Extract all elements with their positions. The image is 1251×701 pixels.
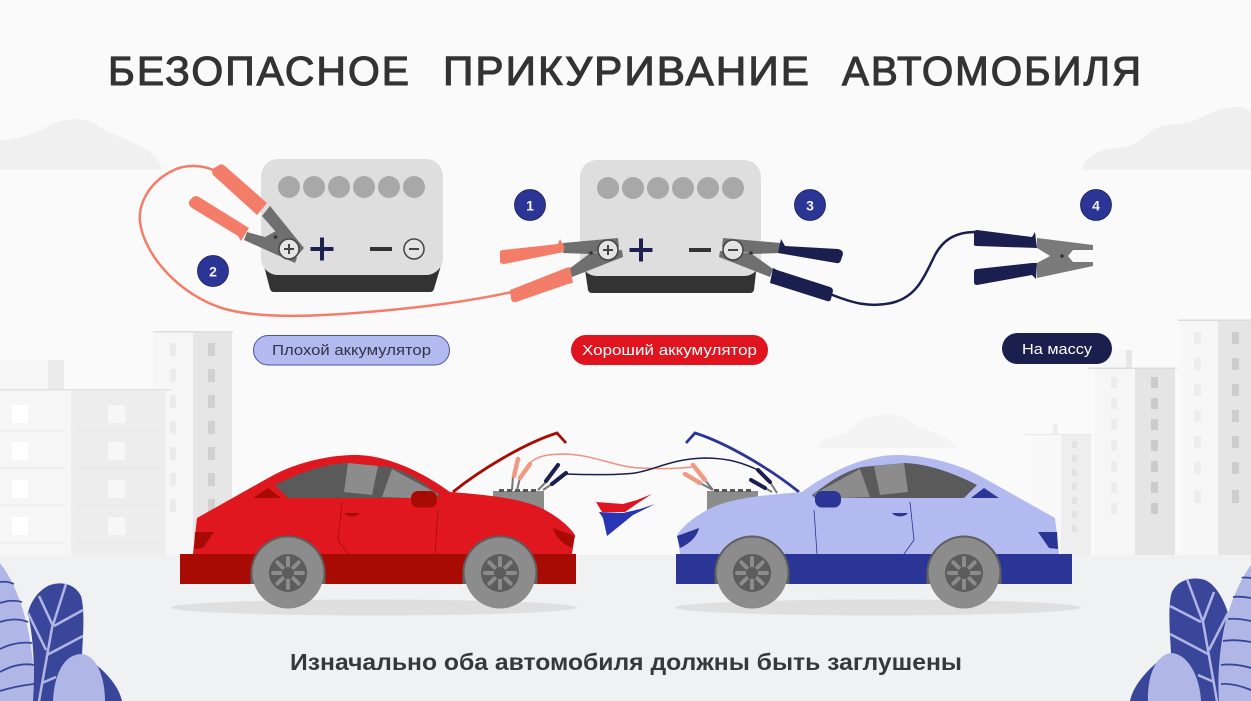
cloud: top left	[0, 119, 162, 170]
title: ПРИКУРИВАНИЕ	[443, 48, 811, 94]
plant: right	[1130, 565, 1251, 701]
plant: left	[0, 563, 122, 701]
badge 1	[514, 190, 546, 220]
badge 3	[794, 190, 826, 220]
label: ground	[1002, 333, 1112, 364]
badge 2	[198, 256, 228, 286]
label: bad battery	[254, 336, 450, 365]
shadow: red car	[171, 600, 577, 616]
caption: Изначально оба автомобиля должны быть заглушены	[290, 649, 962, 675]
label: good battery: Хороший аккумулятор	[582, 343, 757, 359]
label: bad battery: Плохой аккумулятор	[272, 343, 431, 359]
clamp: red on good battery	[500, 238, 623, 302]
title: АВТОМОБИЛЯ	[842, 48, 1143, 94]
battery under red hood	[493, 459, 566, 515]
title	[108, 48, 1143, 94]
clamp: navy to ground	[974, 230, 1093, 285]
buildings: left	[0, 331, 233, 555]
clamp: red on bad battery	[189, 164, 304, 263]
wire: navy jumper cable	[830, 232, 976, 305]
hood wires between cars	[530, 454, 758, 475]
battery: bad	[261, 159, 443, 292]
badge 1: 1	[526, 198, 534, 214]
battery: good	[580, 160, 761, 293]
cloud: top right	[1082, 107, 1251, 170]
ground	[0, 555, 1251, 701]
badge 4	[1080, 190, 1112, 220]
buildings: right	[1024, 320, 1251, 555]
battery under blue hood	[685, 465, 777, 515]
cloud: middle	[817, 414, 957, 448]
badge 2: 2	[209, 264, 217, 280]
label: ground: На массу	[1022, 342, 1093, 358]
label: good battery	[571, 335, 768, 365]
badge 3: 3	[806, 198, 814, 214]
clamp: navy on good battery	[719, 238, 843, 301]
car: blue	[676, 433, 1072, 608]
car: red	[180, 433, 576, 608]
shadow: blue car	[675, 600, 1081, 616]
title: БЕЗОПАСНОЕ	[108, 48, 411, 94]
badge 4: 4	[1092, 198, 1100, 214]
logo	[596, 494, 655, 536]
wire: salmon jumper cable	[140, 166, 512, 316]
